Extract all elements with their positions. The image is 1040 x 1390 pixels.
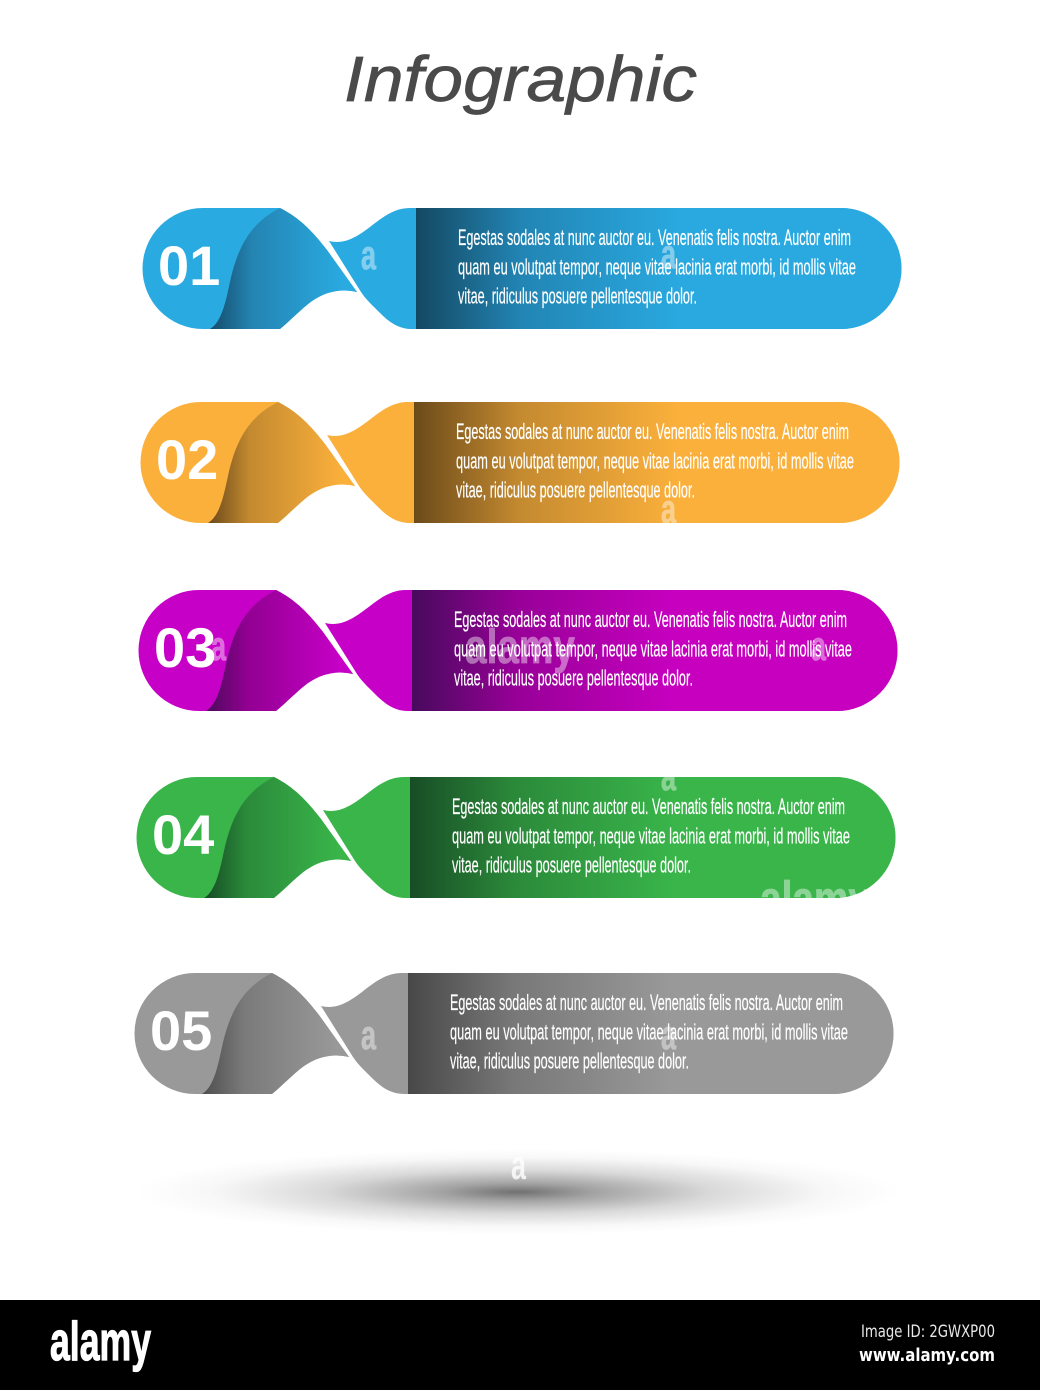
fold shading [206, 590, 353, 711]
left lobe [138, 590, 353, 711]
website: www.alamy.com [859, 1345, 995, 1366]
text panel gradient [414, 402, 899, 523]
panel: item 04 green [136, 777, 895, 898]
left lobe [136, 777, 351, 898]
watermarks: a [361, 1012, 377, 1058]
right lobe [321, 973, 893, 1094]
footer bar [0, 1300, 1040, 1390]
fold shading [208, 402, 355, 523]
text panel gradient [416, 208, 901, 329]
right lobe [323, 777, 895, 898]
image id: Image ID: 2GWXP00 [861, 1322, 995, 1342]
panel: item 02 orange [140, 402, 899, 523]
panel: item 03 magenta [138, 590, 897, 711]
left lobe [140, 402, 355, 523]
watermarks: alamy [465, 621, 575, 674]
number: 05 [150, 999, 212, 1062]
watermarks: alamy [760, 873, 870, 926]
fold shading [204, 777, 351, 898]
watermarks: a [211, 623, 227, 669]
number: 02 [156, 428, 218, 491]
number: 01 [158, 234, 220, 297]
fold shading [202, 973, 349, 1094]
watermarks: a [811, 623, 827, 669]
number: 03 [154, 616, 216, 679]
title: Infographic [344, 43, 697, 115]
watermarks: a [661, 753, 677, 799]
watermarks: a [511, 1142, 527, 1188]
description: vitae, ridiculus posuere pellentesque dolor. [456, 478, 695, 502]
description: vitae, ridiculus posuere pellentesque dolor. [458, 284, 697, 308]
left lobe [134, 973, 349, 1094]
watermarks: a [661, 231, 677, 277]
floor shadow [134, 1149, 902, 1235]
footer logo: alamy [50, 1310, 151, 1372]
right lobe [327, 402, 899, 523]
text panel gradient [412, 590, 897, 711]
panel: item 05 gray [134, 973, 893, 1094]
left lobe [142, 208, 357, 329]
watermarks: a [361, 232, 377, 278]
text panel gradient [408, 973, 893, 1094]
watermarks [211, 231, 870, 1188]
panel: item 01 blue [142, 208, 901, 329]
text panel gradient [410, 777, 895, 898]
watermarks: a [661, 1012, 677, 1058]
watermarks: a [661, 486, 677, 532]
description: vitae, ridiculus posuere pellentesque dolor. [450, 1048, 689, 1074]
description: vitae, ridiculus posuere pellentesque dolor. [452, 852, 691, 878]
fold shading [210, 208, 357, 329]
number: 04 [152, 803, 214, 866]
description: vitae, ridiculus posuere pellentesque dolor. [454, 666, 693, 690]
right lobe [329, 208, 901, 329]
right lobe [325, 590, 897, 711]
